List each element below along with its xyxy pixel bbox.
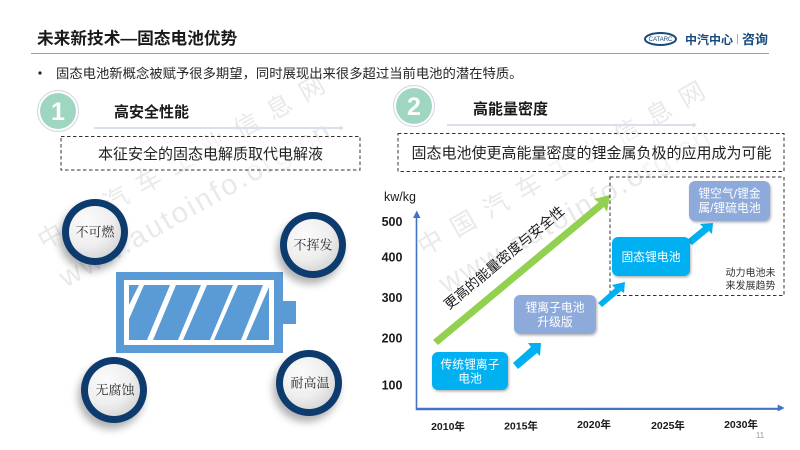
feature: non-corrosive (81, 357, 147, 423)
feature: high temperature resistant (276, 350, 342, 416)
watermark: left: 中国汽车工业信息网 (33, 65, 341, 255)
box: conventional lithium-ion (432, 352, 508, 390)
badge 2: 2 (407, 93, 421, 121)
title: 未来新技术—固态电池优势 (37, 28, 238, 48)
arrow: step 3 (687, 223, 713, 245)
x axis labels (431, 418, 758, 433)
box: conventional lithium-ion: 电池 (458, 372, 482, 386)
arrow: step 2 (598, 282, 625, 307)
box: upgraded lithium-ion: 锂离子电池 (526, 300, 585, 314)
logo: CATARC: 中汽中心 (685, 32, 733, 47)
callout: lithium metal anode (398, 134, 784, 172)
feature: non-corrosive: 无腐蚀 (95, 382, 135, 398)
logo: CATARC (645, 32, 768, 47)
box: lithium-air, metal, sulfur: 属/锂硫电池 (698, 201, 761, 215)
intro bullet text: 固态电池新概念被赋予很多期望，同时展现出来很多超过当前电池的潜在特质。 (56, 65, 522, 81)
arrow: heading underline 1 (94, 126, 344, 130)
x axis labels: 2015年 (504, 420, 538, 432)
badge 2 (394, 86, 434, 126)
y axis labels: 200 (382, 332, 402, 346)
x axis labels: 2020年 (577, 418, 611, 431)
logo: CATARC: CATARC (649, 37, 673, 43)
watermark: left: www.autoinfo.org.cn (53, 114, 338, 295)
icon: battery (116, 272, 296, 353)
page number: 11 (756, 431, 765, 440)
watermark: right: 中国汽车工业信息网 (413, 71, 721, 261)
y axis labels: 400 (382, 250, 402, 264)
badge 1: 1 (51, 98, 65, 126)
feature: non-flammable (62, 199, 128, 265)
box: upgraded lithium-ion (514, 295, 596, 334)
feature: non-flammable: 不可燃 (75, 224, 115, 240)
y axis labels: 100 (382, 378, 402, 392)
dashed frame: future trend: 来发展趋势 (726, 279, 776, 292)
chart axes (413, 210, 784, 411)
y axis labels: 500 (382, 215, 402, 229)
y axis labels: 300 (382, 291, 402, 305)
feature: high temperature resistant: 耐高温 (290, 376, 330, 390)
watermark: right: www.autoinfo.org.cn (433, 120, 718, 301)
x axis labels: 2030年 (724, 418, 758, 431)
callout: intrinsic safety: 本征安全的固态电解质取代电解液 (98, 145, 323, 163)
dashed frame: future trend: 动力电池未 (726, 266, 776, 279)
heading: high energy density: 高能量密度 (473, 100, 548, 118)
x axis labels: 2010年 (431, 420, 465, 433)
y axis labels: kw/kg (384, 190, 416, 204)
feature: non-volatile (280, 212, 346, 278)
arrow: green trend (433, 195, 610, 345)
logo: CATARC: 咨询 (742, 32, 768, 47)
box: solid-state lithium (612, 237, 690, 276)
badge 1 (38, 90, 78, 132)
arrow: heading underline 2 (447, 122, 697, 128)
label: higher energy density and safety: 更高的能量密度与安全性 (441, 202, 567, 312)
callout: lithium metal anode: 固态电池使更高能量密度的锂金属负极的应用成为可能 (411, 144, 772, 162)
x axis labels: 2025年 (651, 419, 685, 432)
box: lithium-air, metal, sulfur: 锂空气/锂金 (698, 186, 761, 200)
box: lithium-air, metal, sulfur (689, 181, 770, 221)
box: solid-state lithium: 固态锂电池 (622, 250, 681, 264)
box: conventional lithium-ion: 传统锂离子 (440, 358, 500, 372)
y axis labels (382, 190, 416, 392)
box: upgraded lithium-ion: 升级版 (537, 315, 573, 329)
dashed frame: future trend (610, 177, 784, 296)
feature: non-volatile: 不挥发 (293, 238, 333, 252)
arrow: step 1 (513, 343, 541, 369)
callout: intrinsic safety (61, 136, 360, 170)
heading: high safety: 高安全性能 (114, 103, 189, 121)
